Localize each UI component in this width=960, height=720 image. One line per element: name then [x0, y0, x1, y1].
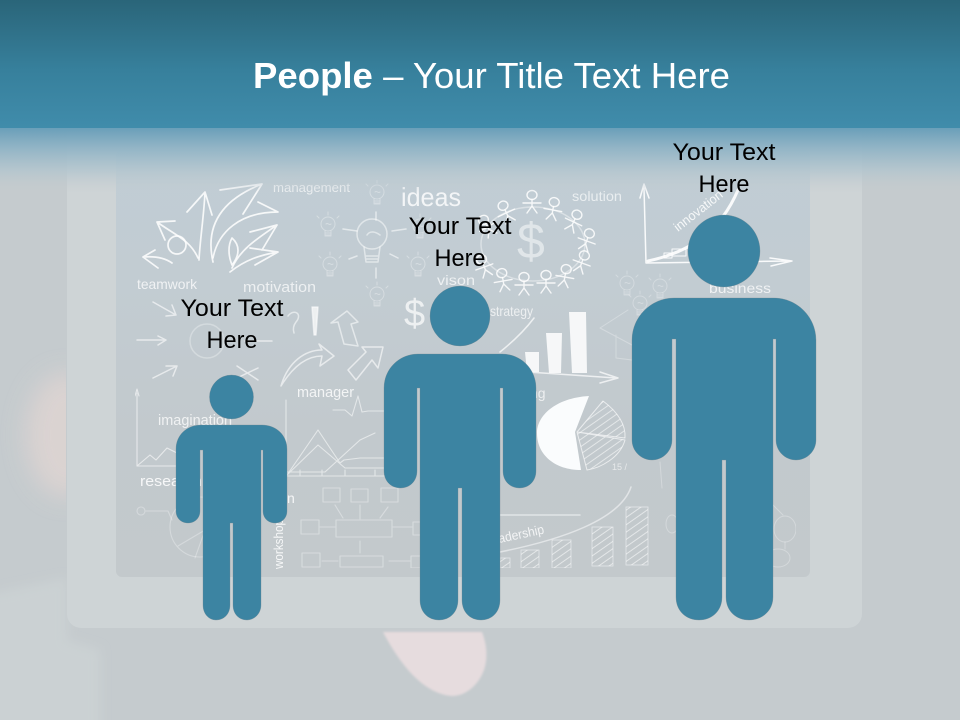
- text: small person label: Your Text: [180, 295, 284, 322]
- doodle words: $: [517, 213, 545, 269]
- person: small: [176, 375, 287, 620]
- pie doodle at left: [137, 497, 230, 558]
- doodle words: research: [140, 473, 202, 490]
- text: small person label: Here: [206, 327, 258, 354]
- question mark and exclamation doodle: [288, 307, 358, 346]
- tablet body: [67, 110, 862, 628]
- header band: [0, 0, 960, 128]
- thumb at bottom: [383, 632, 486, 696]
- text: medium person label: Your Text: [408, 213, 512, 240]
- tablet screen: [116, 150, 810, 577]
- doodle words: imagination: [158, 412, 232, 429]
- doodle words: $: [404, 293, 425, 335]
- doodle words: workshop: [271, 519, 286, 570]
- doodle words: vison: [437, 272, 475, 288]
- doodle words: ng: [530, 385, 546, 401]
- doodle words: business: [709, 280, 771, 296]
- doodle words: n: [287, 490, 295, 506]
- doodle words: innovation: [671, 187, 726, 234]
- lower left lighter area: [0, 578, 100, 720]
- soft fade below header: [0, 128, 960, 194]
- person: large: [632, 215, 816, 620]
- background photo: blurred tablet held in hand: [22, 188, 862, 697]
- doodle words: [137, 180, 771, 570]
- light bulbs around ideas: [317, 180, 431, 306]
- curved arrows: [281, 344, 383, 386]
- title: People – Your Title Text Here: [253, 55, 730, 96]
- growth bars doodle: [500, 507, 648, 568]
- house and small bulbs doodle: [600, 271, 671, 360]
- mind-map circles doodle: [660, 462, 796, 567]
- text: large person label: [672, 139, 776, 198]
- blurred finger at left: [22, 372, 66, 498]
- doodle words: teamwork: [137, 276, 198, 292]
- doodle words: management: [273, 180, 350, 195]
- arrow cluster: [143, 184, 278, 272]
- imagination chart: [135, 389, 186, 466]
- ring of stick figures: [472, 190, 599, 295]
- doodle words: manager: [297, 384, 354, 401]
- doodle words: motivation: [243, 279, 316, 296]
- line chart doodle: [286, 396, 400, 476]
- central bulb: [357, 219, 387, 262]
- doodle words: strategy: [490, 303, 533, 319]
- left cluster of arrows: [137, 302, 272, 380]
- doodle words: ideas: [401, 182, 461, 212]
- person: medium: [384, 286, 536, 620]
- text: small person label: [180, 295, 284, 354]
- bar chart doodle: [525, 312, 587, 373]
- doodle words: leadership: [488, 522, 545, 548]
- doodle words: solution: [572, 188, 622, 204]
- text: medium person label: Here: [434, 245, 486, 272]
- text: large person label: Your Text: [672, 139, 776, 166]
- text: large person label: Here: [698, 171, 750, 198]
- doodle words: 15 /: [612, 462, 628, 472]
- innovation chart: [640, 184, 792, 266]
- doodles on tablet screen: [135, 180, 796, 568]
- flowchart doodle: [301, 488, 427, 568]
- pie chart doodle: [537, 396, 589, 470]
- text: medium person label: [408, 213, 512, 272]
